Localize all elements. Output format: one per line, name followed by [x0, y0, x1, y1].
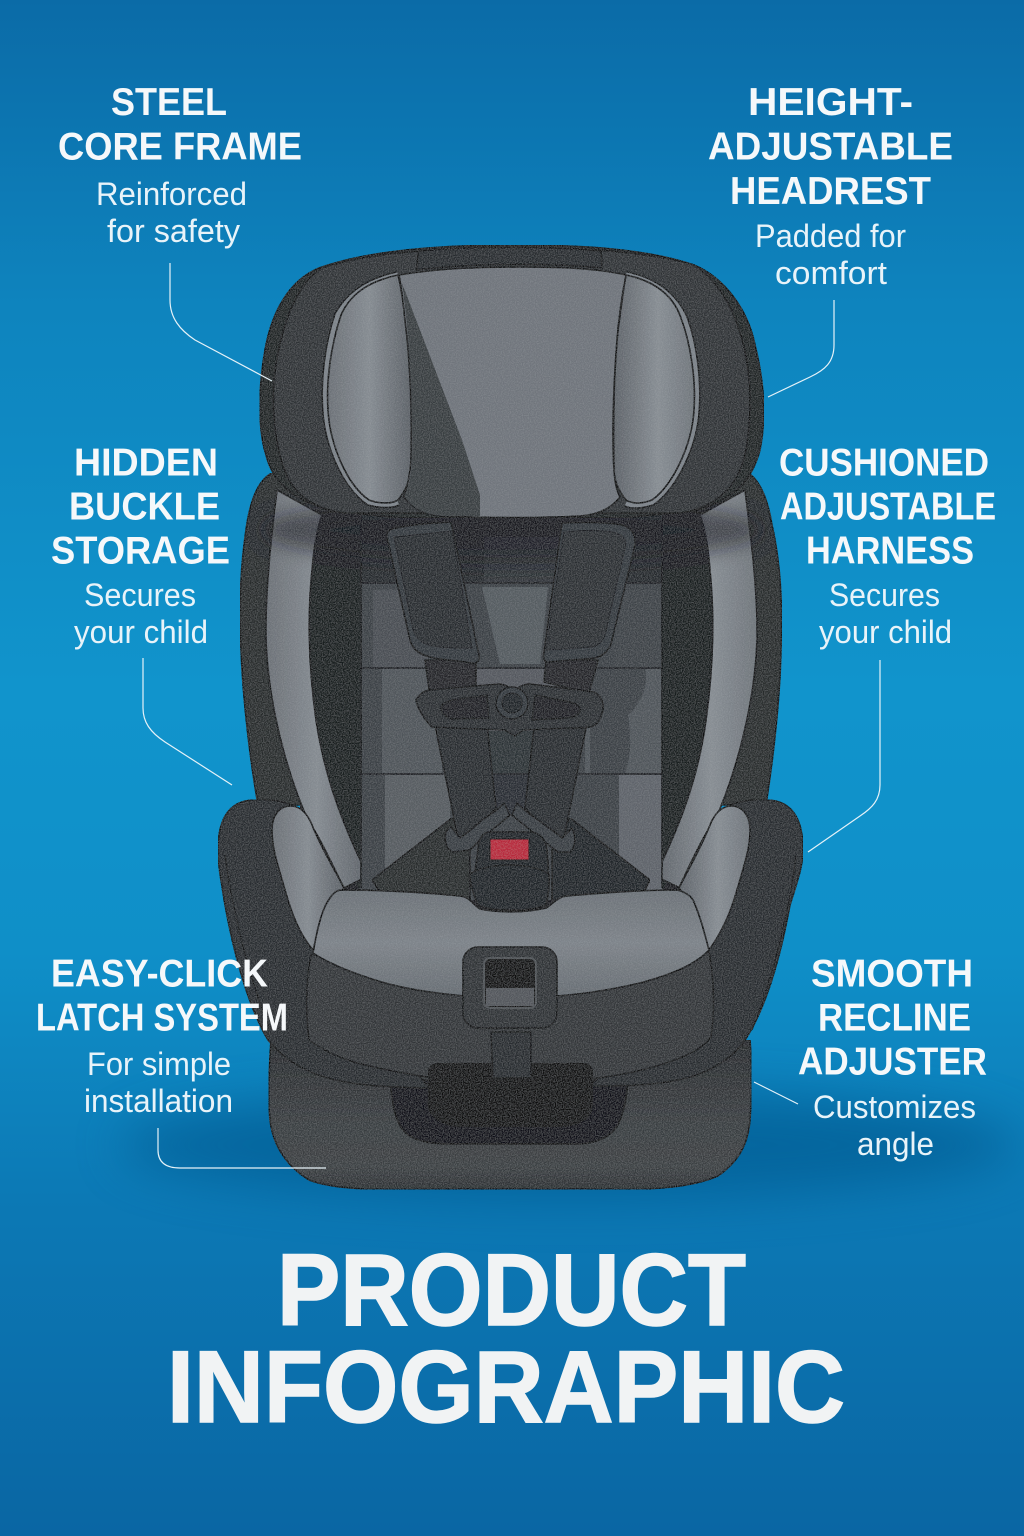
seat cushion: [313, 890, 709, 996]
latch release frame: [463, 947, 557, 1028]
description: angle: [857, 1126, 934, 1162]
description: [74, 577, 208, 650]
center pad: [399, 267, 626, 518]
heading: [779, 442, 996, 572]
center pad shadow: [402, 283, 480, 516]
heading: CUSHIONED: [779, 442, 989, 484]
callout: steel core frame: [58, 81, 302, 381]
left bolster inner line: [225, 855, 270, 1030]
description: [84, 1046, 233, 1119]
right upper strap: [544, 660, 598, 693]
leader line: [808, 660, 880, 852]
heading: [36, 952, 288, 1040]
callout: easy-click latch system: [36, 952, 326, 1168]
right channel: [662, 510, 722, 890]
heading: CORE FRAME: [58, 126, 302, 168]
heading: ADJUSTER: [798, 1040, 987, 1084]
right lower strap: [525, 728, 586, 838]
leader line: [170, 263, 272, 381]
description: [96, 176, 247, 249]
backrest outer shell: [240, 473, 782, 920]
headrest cast shadow: [262, 496, 762, 564]
seat well filler: [300, 700, 720, 920]
description: Customizes: [813, 1089, 976, 1125]
right pad rim: [626, 275, 696, 505]
left upper strap: [425, 660, 476, 696]
car seat: [218, 245, 803, 1189]
leader line: [158, 1128, 326, 1168]
heading: BUCKLE: [69, 486, 220, 528]
title: INFOGRAPHIC: [167, 1330, 845, 1444]
heading: STORAGE: [51, 530, 230, 572]
description: for safety: [107, 213, 240, 249]
leader line: [768, 300, 834, 397]
lower front cushion: [307, 952, 713, 1080]
heading: SMOOTH: [811, 952, 973, 996]
headrest top strip: [417, 247, 602, 270]
heading: EASY-CLICK: [51, 952, 268, 996]
red release button: [490, 839, 529, 860]
callout: smooth recline adjuster: [754, 952, 987, 1162]
left buckle tongue: [445, 803, 510, 852]
left lower strap: [435, 725, 496, 838]
chest clip: [416, 684, 603, 736]
description: your child: [74, 614, 208, 650]
center panel: [360, 520, 662, 900]
description: Reinforced: [96, 176, 247, 212]
lap straps: [372, 818, 650, 900]
right shoulder pad: [544, 522, 635, 662]
left wing: [266, 490, 368, 888]
headrest: [260, 245, 764, 518]
right bolster inner line: [752, 855, 796, 1030]
left side pad: [328, 275, 412, 503]
heading: HEIGHT-: [748, 81, 913, 124]
clip center button: [496, 687, 528, 719]
title: [167, 1233, 845, 1444]
base recess: [390, 1080, 628, 1144]
right side pad: [614, 275, 694, 503]
heading: RECLINE: [818, 996, 971, 1040]
seat base: [269, 1040, 752, 1189]
description: comfort: [775, 255, 887, 291]
left shoulder pad: [387, 522, 479, 663]
clip left button: [441, 695, 489, 719]
right buckle tongue: [512, 803, 575, 852]
callout: cushioned adjustable harness: [779, 442, 996, 852]
heading: HEADREST: [730, 170, 931, 213]
left bolster light: [272, 806, 344, 950]
callout: hidden buckle storage: [51, 442, 232, 785]
heading: STEEL: [111, 81, 227, 124]
bolster shell right: [590, 800, 803, 1086]
description: Secures: [84, 577, 196, 613]
bolster shell left: [218, 800, 430, 1088]
description: your child: [819, 614, 952, 650]
side bolsters: [218, 800, 803, 1127]
right wing: [655, 490, 757, 888]
adjuster strap: [491, 1032, 531, 1078]
leader line: [143, 658, 232, 785]
buckle body: [474, 832, 549, 880]
description: For simple: [87, 1046, 231, 1082]
callout: height-adjustable headrest: [708, 81, 953, 397]
harness: [387, 522, 635, 880]
heading: ADJUSTABLE: [708, 126, 953, 168]
floor shadow: [120, 1090, 1020, 1200]
right bolster light: [679, 806, 750, 950]
description: Padded for: [755, 218, 906, 254]
under-seat notch: [428, 1063, 593, 1127]
clip right button: [532, 695, 580, 720]
heading: HIDDEN: [74, 442, 218, 484]
left pad rim: [326, 275, 398, 504]
leader line: [754, 1082, 798, 1104]
left channel: [300, 510, 362, 890]
description: [813, 1089, 976, 1162]
description: Secures: [829, 577, 940, 613]
crotch strap pad: [470, 865, 549, 910]
description: [755, 218, 906, 291]
heading: [58, 81, 302, 168]
latch opening: [484, 958, 536, 1008]
heading: HARNESS: [806, 530, 974, 572]
heading: LATCH SYSTEM: [36, 996, 288, 1040]
description: [819, 577, 952, 650]
heading: [51, 442, 230, 572]
description: installation: [84, 1083, 233, 1119]
heading: [798, 952, 987, 1084]
headrest front shell: [274, 248, 750, 513]
title: PRODUCT: [277, 1233, 746, 1347]
heading: [708, 81, 953, 213]
